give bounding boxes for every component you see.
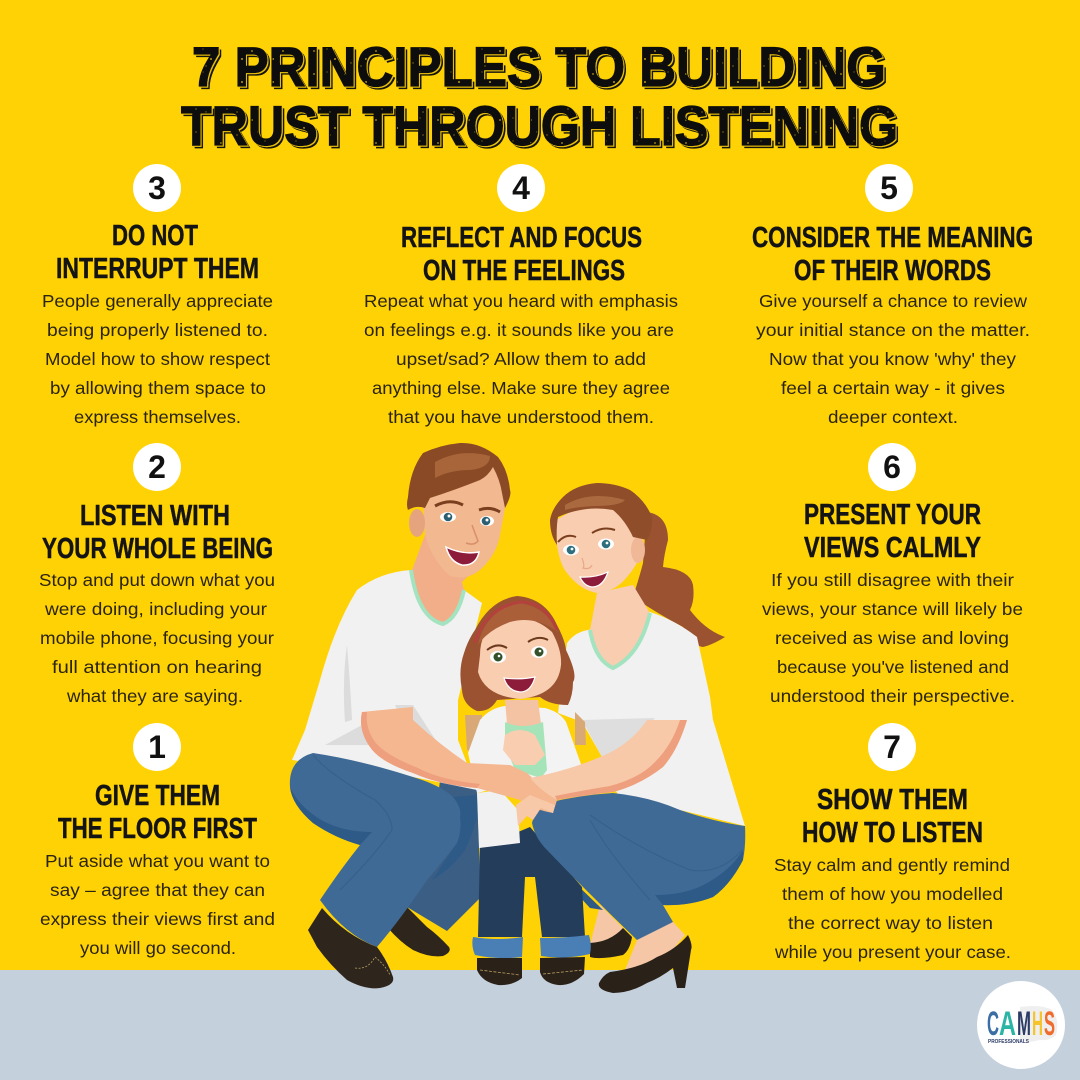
principle 2: listen with your whole being: mobile phone, focusing your bbox=[40, 628, 274, 648]
woman's front leg bbox=[532, 793, 745, 940]
title: TRUST THROUGH LISTENING bbox=[181, 94, 898, 157]
illustration: family bbox=[290, 443, 745, 993]
man's shirt bbox=[292, 570, 482, 790]
principle 4: reflect and focus on the feelings: ON THE FEELINGS bbox=[423, 255, 625, 287]
woman's shirt bbox=[558, 612, 745, 826]
principle 7: show them how to listen bbox=[774, 723, 1011, 962]
girl's jacket and top bbox=[465, 700, 586, 848]
principle 2: listen with your whole being: YOUR WHOLE BEING bbox=[42, 533, 273, 565]
principle 3: do not interrupt them: INTERRUPT THEM bbox=[56, 253, 259, 285]
title bbox=[181, 35, 898, 157]
principle 1: give them the floor first: 1 bbox=[148, 729, 166, 765]
principle 4: reflect and focus on the feelings bbox=[364, 164, 678, 427]
logo: CAMHS Professionals: H bbox=[1032, 1005, 1043, 1043]
principle 4: reflect and focus on the feelings: Repeat what you heard with emphasis bbox=[364, 291, 678, 311]
principle 7: show them how to listen: while you present your case. bbox=[774, 942, 1011, 962]
principle 1: give them the floor first: express their views first and bbox=[40, 909, 275, 929]
principle 5: consider the meaning of their words: Now that you know 'why' they bbox=[769, 349, 1016, 369]
principle 3: do not interrupt them: DO NOT bbox=[112, 220, 198, 252]
floor band bbox=[0, 970, 1080, 1080]
principle 3: do not interrupt them: by allowing them space to bbox=[50, 378, 266, 398]
principle 4: reflect and focus on the feelings: anything else. Make sure they agree bbox=[372, 378, 670, 398]
principle 3: do not interrupt them: Model how to show respect bbox=[45, 349, 270, 369]
logo: CAMHS Professionals: S bbox=[1044, 1005, 1055, 1043]
principle 3: do not interrupt them: 3 bbox=[148, 170, 166, 206]
principle 1: give them the floor first: say – agree that they can bbox=[50, 880, 265, 900]
woman's head bbox=[550, 483, 652, 593]
principle 6: present your views calmly: VIEWS CALMLY bbox=[804, 532, 981, 564]
principle 6: present your views calmly: because you've listened and bbox=[777, 657, 1009, 677]
man's front shoe bbox=[308, 908, 393, 988]
principle 2: listen with your whole being: Stop and put down what you bbox=[39, 570, 275, 590]
principle 6: present your views calmly: received as wise and loving bbox=[775, 628, 1009, 648]
principle 6: present your views calmly: 6 bbox=[883, 449, 901, 485]
principle 2: listen with your whole being bbox=[39, 443, 275, 706]
principle 5: consider the meaning of their words bbox=[752, 164, 1033, 427]
man's arm bbox=[361, 707, 557, 813]
woman's arm bbox=[530, 720, 687, 800]
principle 5: consider the meaning of their words: Give yourself a chance to review bbox=[759, 291, 1027, 311]
woman's back foot and shoe bbox=[570, 878, 632, 958]
logo: CAMHS Professionals: PROFESSIONALS bbox=[988, 1039, 1030, 1045]
principle 3: do not interrupt them: being properly listened to. bbox=[47, 320, 268, 340]
principle 2: listen with your whole being: LISTEN WITH bbox=[80, 500, 230, 532]
woman's ponytail bbox=[633, 512, 725, 647]
principle 7: show them how to listen: SHOW THEM bbox=[817, 784, 968, 816]
principle 4: reflect and focus on the feelings: that you have understood them. bbox=[388, 407, 654, 427]
child's legs bbox=[472, 827, 591, 985]
principle 4: reflect and focus on the feelings: upset/sad? Allow them to add bbox=[396, 349, 646, 369]
principle 6: present your views calmly: If you still disagree with their bbox=[771, 570, 1014, 590]
principle 6: present your views calmly bbox=[762, 443, 1023, 706]
principle 1: give them the floor first bbox=[40, 723, 275, 958]
man's front leg bbox=[290, 753, 461, 947]
man's neck and collar bbox=[411, 535, 490, 624]
principle 7: show them how to listen: HOW TO LISTEN bbox=[802, 817, 983, 849]
fingers bbox=[516, 795, 555, 826]
principle 7: show them how to listen: them of how you modelled bbox=[782, 884, 1003, 904]
woman's front foot and heel bbox=[599, 922, 692, 993]
principle 1: give them the floor first: Put aside what you want to bbox=[45, 851, 270, 871]
woman's neck and collar bbox=[590, 585, 650, 668]
principle 7: show them how to listen: the correct way to listen bbox=[788, 913, 993, 933]
principle 4: reflect and focus on the feelings: REFLECT AND FOCUS bbox=[401, 222, 642, 254]
logo: CAMHS Professionals bbox=[977, 981, 1065, 1069]
principle 2: listen with your whole being: were doing, including your bbox=[44, 599, 267, 619]
principle 5: consider the meaning of their words: your initial stance on the matter. bbox=[756, 320, 1030, 340]
principle 1: give them the floor first: THE FLOOR FIRST bbox=[58, 813, 257, 845]
principle 6: present your views calmly: understood their perspective. bbox=[770, 686, 1015, 706]
logo: CAMHS Professionals: M bbox=[1017, 1005, 1031, 1043]
principle 2: listen with your whole being: what they are saying. bbox=[66, 686, 243, 706]
principle 3: do not interrupt them: People generally appreciate bbox=[42, 291, 273, 311]
principle 6: present your views calmly: PRESENT YOUR bbox=[804, 499, 981, 531]
man's back leg and shoe bbox=[388, 780, 481, 956]
man's head bbox=[407, 443, 510, 578]
principle 3: do not interrupt them bbox=[42, 164, 273, 427]
principle 2: listen with your whole being: full attention on hearing bbox=[52, 657, 262, 677]
title: 7 PRINCIPLES TO BUILDING bbox=[192, 35, 886, 98]
principle 5: consider the meaning of their words: OF THEIR WORDS bbox=[794, 255, 991, 287]
principle 7: show them how to listen: Stay calm and gently remind bbox=[774, 855, 1010, 875]
principle 7: show them how to listen: 7 bbox=[883, 729, 901, 765]
principle 3: do not interrupt them: express themselves. bbox=[74, 407, 241, 427]
principle 5: consider the meaning of their words: 5 bbox=[880, 170, 898, 206]
principle 5: consider the meaning of their words: deeper context. bbox=[828, 407, 958, 427]
principle 4: reflect and focus on the feelings: on feelings e.g. it sounds like you are bbox=[364, 320, 674, 340]
principle 6: present your views calmly: views, your stance will likely be bbox=[762, 599, 1023, 619]
logo: CAMHS Professionals: A bbox=[999, 1005, 1016, 1043]
principle 1: give them the floor first: you will go second. bbox=[80, 938, 236, 958]
principle 4: reflect and focus on the feelings: 4 bbox=[512, 170, 530, 206]
principle 5: consider the meaning of their words: feel a certain way - it gives bbox=[781, 378, 1005, 398]
logo: CAMHS Professionals: C bbox=[987, 1005, 999, 1043]
principle 2: listen with your whole being: 2 bbox=[148, 449, 166, 485]
principle 1: give them the floor first: GIVE THEM bbox=[95, 780, 220, 812]
girl's head bbox=[460, 596, 574, 711]
